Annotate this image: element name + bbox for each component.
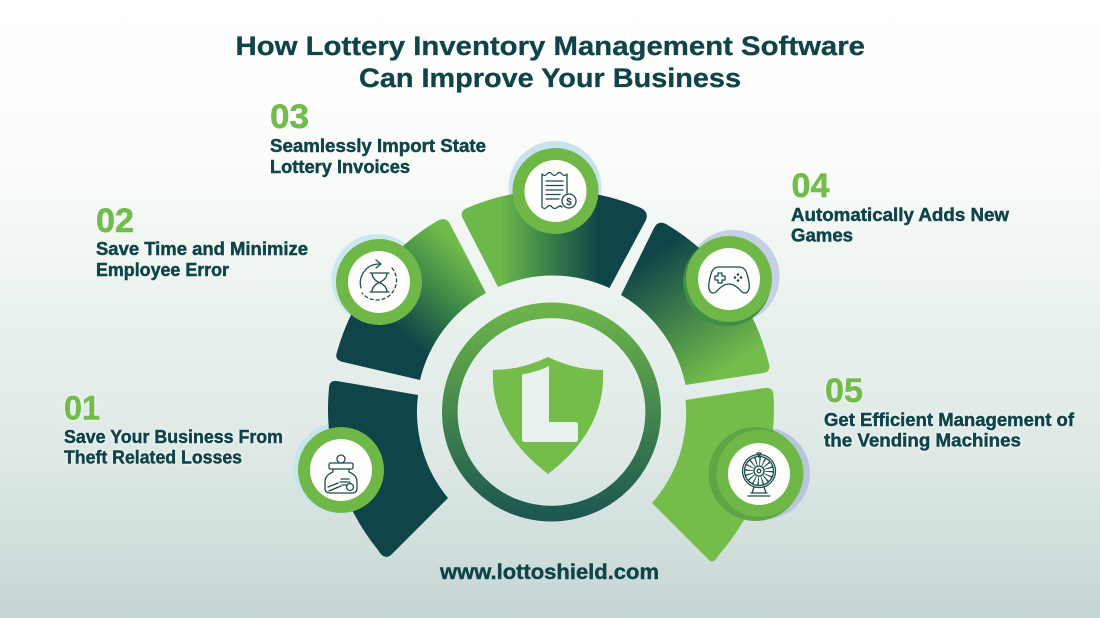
step 1 text: Save Your Business From <box>64 427 283 447</box>
step 3 icon badge: receipt <box>512 148 598 234</box>
step 1 text <box>64 390 283 468</box>
step 2 text: Employee Error <box>96 260 229 280</box>
step 1 icon badge: coin jar <box>298 427 384 513</box>
title <box>236 31 865 93</box>
step 3 text <box>270 98 486 177</box>
website url: www.lottoshield.com <box>439 561 659 584</box>
icon: receipt with dollar coin <box>542 172 576 208</box>
badge halos behind the segments <box>294 141 810 520</box>
step 4 text <box>791 167 1010 246</box>
icon: coin jar <box>325 455 357 493</box>
icon: hourglass with arrows <box>360 260 397 300</box>
step 4 text: Games <box>791 226 853 246</box>
step 2 icon badge: hourglass <box>336 239 422 325</box>
center ring <box>450 310 653 514</box>
step 4 text: Automatically Adds New <box>791 205 1010 225</box>
shield logo <box>493 357 603 474</box>
step 2 text: 02 <box>96 202 134 240</box>
step 2 text <box>96 202 308 280</box>
icon: prize wheel <box>742 453 776 496</box>
step 5 icon badge: prize wheel <box>708 427 804 521</box>
step 3 icon badge: receipt: $ <box>566 197 572 208</box>
step 5 text: the Vending Machines <box>824 430 1021 450</box>
segment 1: dark lower left <box>328 381 448 557</box>
step 4 text: 04 <box>792 167 830 205</box>
step 2 text: Save Time and Minimize <box>96 239 308 259</box>
step 3 text: Seamlessly Import State <box>270 136 486 156</box>
step 1 text: 01 <box>64 390 100 428</box>
segment 4: upper right gradient <box>621 223 769 385</box>
title: Can Improve Your Business <box>359 63 741 93</box>
title: How Lottery Inventory Management Software <box>236 31 865 61</box>
segment 3: top gradient <box>462 190 647 288</box>
step 1 text: Theft Related Losses <box>64 448 242 468</box>
segment 5: green lower right <box>652 388 774 562</box>
step 5 text: 05 <box>825 372 863 410</box>
segment 2: upper left gradient <box>336 219 486 380</box>
step 5 text: Get Efficient Management of <box>824 410 1075 430</box>
step 3 text: 03 <box>270 98 309 136</box>
step 5 text <box>824 372 1075 450</box>
icon: game controller <box>709 267 749 293</box>
step 3 text: Lottery Invoices <box>270 157 410 177</box>
step 4 icon badge: game controller <box>683 236 772 326</box>
